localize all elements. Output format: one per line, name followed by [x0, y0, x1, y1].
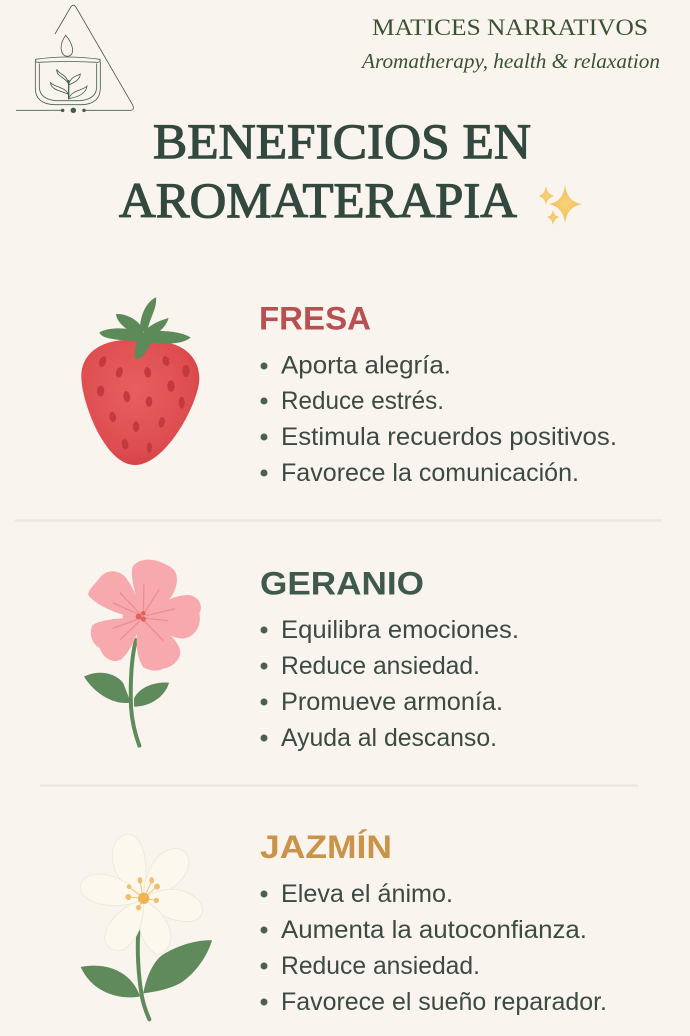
list: fresa: Reduce estrés. — [281, 387, 444, 415]
panel: jazmin — [80, 829, 607, 1019]
title: AROMATERAPIA — [119, 172, 517, 228]
title — [119, 113, 531, 228]
list: geranio: Ayuda al descanso. — [281, 724, 497, 752]
tagline: Aromatherapy, health & relaxation — [360, 49, 660, 73]
list: geranio — [260, 616, 519, 752]
list: geranio: Reduce ansiedad. — [281, 652, 480, 680]
brand name: MATICES NARRATIVOS — [372, 15, 648, 41]
list: jazmin: Reduce ansiedad. — [281, 952, 480, 980]
list: fresa: Aporta alegría. — [281, 352, 451, 380]
icon: geranium flower — [84, 560, 201, 746]
divider lines — [15, 520, 662, 786]
icon: strawberry — [81, 297, 199, 465]
list: jazmin: Aumenta la autoconfianza. — [281, 916, 587, 944]
list: jazmin: Favorece el sueño reparador. — [281, 988, 607, 1016]
list: fresa: Estimula recuerdos positivos. — [281, 423, 617, 451]
panel: fresa — [81, 297, 617, 487]
list: fresa — [260, 352, 617, 487]
heading: jazmin: JAZMÍN — [260, 829, 392, 865]
icon: candle logo — [16, 5, 133, 113]
heading: geranio: GERANIO — [260, 566, 424, 602]
icon: sparkles — [539, 185, 582, 225]
icon: jasmine flower — [80, 834, 212, 1019]
list: geranio: Equilibra emociones. — [281, 616, 519, 644]
list: fresa: Favorece la comunicación. — [281, 459, 579, 487]
list: jazmin — [260, 880, 607, 1016]
panel: geranio — [84, 560, 519, 752]
list: geranio: Promueve armonía. — [281, 688, 503, 716]
list: jazmin: Eleva el ánimo. — [281, 880, 453, 908]
title: BENEFICIOS EN — [153, 113, 531, 169]
heading: fresa: FRESA — [259, 300, 371, 336]
